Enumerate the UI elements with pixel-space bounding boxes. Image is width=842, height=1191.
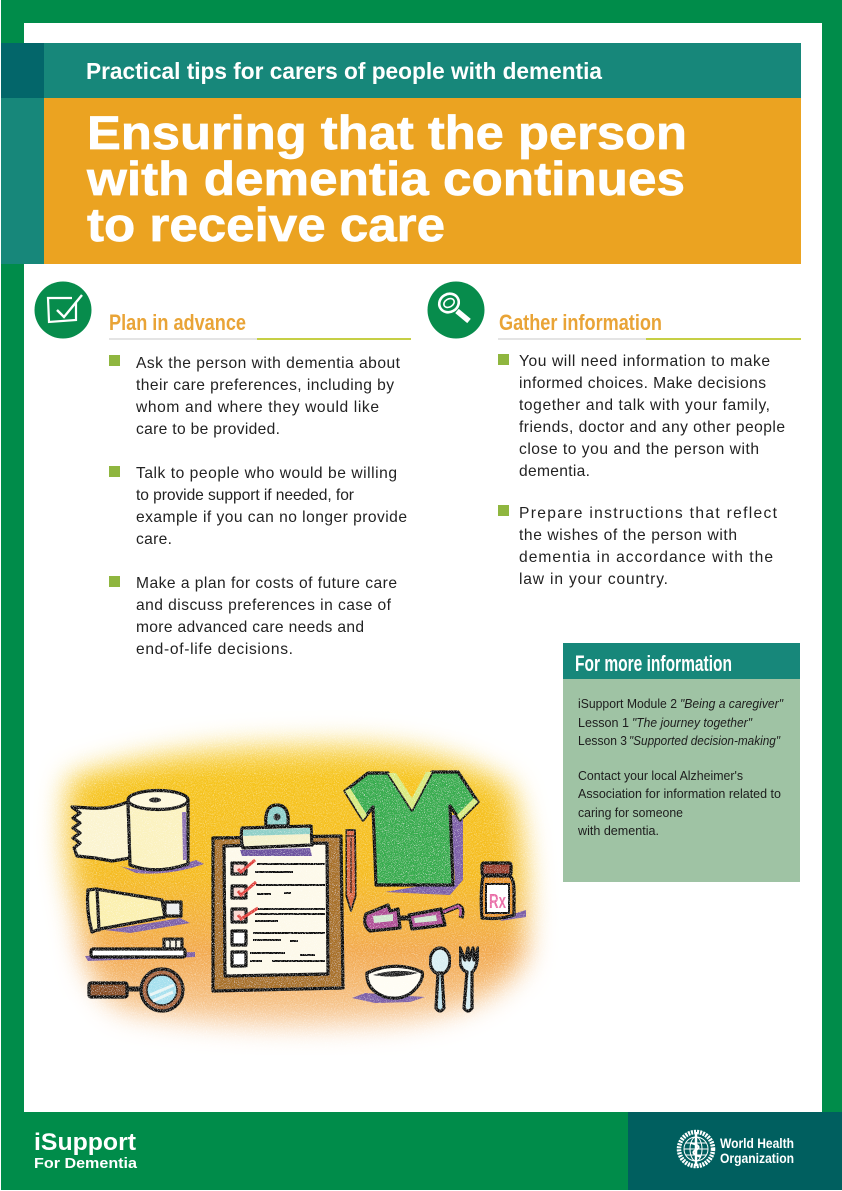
bullet: prepare instructions: law in your country. [519, 571, 668, 588]
bullet: informed choices [498, 353, 785, 480]
header band: subtitle: Practical tips for carers of people with dementia [86, 58, 602, 84]
bullet: care preferences: Ask the person with dementia about [136, 355, 401, 372]
bullet: prepare instructions: dementia in accordance with the [519, 549, 773, 566]
bullet: costs of future care: end-of-life decisions. [136, 641, 293, 658]
heading: gather information: Gather information [499, 310, 662, 335]
toilet roll [72, 790, 204, 874]
text: contact [577, 769, 781, 838]
header band: subtitle [1, 43, 801, 98]
t-shirt [345, 772, 478, 895]
checklist boxes [232, 860, 258, 966]
illustration: care items [43, 722, 548, 1044]
bullet: talk to people: to provide support if needed, for [136, 487, 354, 504]
bullet: care preferences [109, 355, 401, 438]
icon: checkbox [34, 282, 92, 338]
logo: iSupport For Dementia: For Dementia [34, 1156, 138, 1172]
bullet: informed choices: dementia. [519, 463, 590, 480]
logo: World Health Organization: Organization [720, 1150, 794, 1166]
bullet: informed choices: close to you and the person with [519, 441, 759, 458]
checklist lines [250, 864, 325, 961]
bowl [352, 966, 425, 1003]
text: lessons: "The journey together" [632, 716, 753, 730]
bullet: informed choices: informed choices. Make decisions [519, 375, 766, 392]
header band: title: Ensuring that the person [87, 106, 687, 159]
spoon [430, 948, 450, 1011]
footer [1, 1112, 842, 1190]
bullet: informed choices: You will need information to make [519, 353, 770, 370]
toothbrush [85, 939, 195, 961]
heading: plan in advance: Plan in advance [109, 310, 246, 335]
icon: magnifying glass [428, 282, 484, 338]
toothpaste tube [88, 889, 190, 933]
panel: for more information [563, 643, 800, 882]
bullet: care preferences: whom and where they would like [135, 399, 379, 416]
bullet: prepare instructions: Prepare instructions that reflect [519, 505, 778, 522]
heading: for more information: For more information [575, 651, 732, 676]
text: lessons: Lesson 3 [578, 734, 627, 748]
text: contact: Association for information related to [578, 787, 781, 801]
bullet: costs of future care: more advanced care needs and [136, 619, 364, 636]
glasses [365, 905, 462, 931]
text: lessons: "Supported decision-making" [629, 734, 781, 748]
text: lessons: iSupport Module 2 [578, 697, 677, 711]
pencil [346, 830, 356, 911]
text: lessons: Lesson 1 [578, 716, 629, 730]
icon: WHO emblem [679, 1132, 713, 1166]
bullet: talk to people: care. [136, 531, 172, 548]
text: contact: caring for someone [578, 806, 683, 820]
logo: iSupport For Dementia: iSupport [34, 1129, 136, 1156]
bullet: care preferences: care to be provided. [136, 421, 280, 438]
header band: title: with dementia continues [86, 152, 685, 205]
bullet: talk to people: Talk to people who would be willing [136, 465, 397, 482]
logo: iSupport For Dementia [34, 1129, 138, 1172]
logo: World Health Organization: World Health [720, 1135, 794, 1151]
bullet: prepare instructions [498, 505, 778, 588]
bullet: costs of future care: Make a plan for costs of future care [136, 575, 397, 592]
header band: title [1, 98, 801, 264]
text: lessons: "Being a caregiver" [680, 697, 784, 711]
fork [460, 948, 478, 1011]
bullet: talk to people: example if you can no longer provide [136, 509, 407, 526]
magnifying glass [89, 969, 183, 1011]
text: contact: with dementia. [577, 824, 659, 838]
prescription bottle [481, 863, 526, 921]
bullet: costs of future care: and discuss preferences in case of [136, 597, 392, 614]
crayon background [43, 722, 548, 1044]
panel: gather information [428, 282, 801, 588]
bullet: care preferences: their care preferences, including by [136, 377, 394, 394]
bullet: informed choices: friends, doctor and any other people [519, 419, 785, 436]
bullet: talk to people [109, 465, 407, 548]
text: contact: Contact your local Alzheimer's [578, 769, 743, 783]
logo: World Health Organization [679, 1132, 794, 1166]
prescription bottle: Rx [489, 891, 506, 913]
text: lessons [578, 697, 784, 748]
bullet: prepare instructions: the wishes of the person with [519, 527, 737, 544]
header band: title: to receive care [87, 198, 445, 251]
bullet: costs of future care [109, 575, 397, 658]
panel: plan in advance [34, 282, 411, 658]
clipboard [213, 805, 343, 991]
bullet: informed choices: together and talk with your family, [519, 397, 770, 414]
